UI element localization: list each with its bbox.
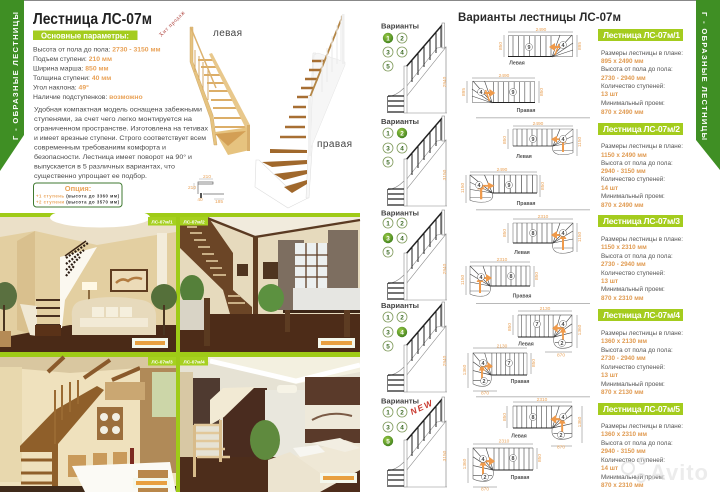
variant row 3: plan views: 2310 bbox=[538, 214, 549, 220]
variant row 5: plan views: 1360 bbox=[462, 458, 468, 469]
left side ribbon: Г - ОБРАЗНЫЕ ЛЕСТНИЦЫ bbox=[11, 12, 20, 140]
photo 4: bedroom staircase: ЛС-07м/4 bbox=[183, 360, 205, 366]
variant row 4: plan views: Левая bbox=[518, 342, 534, 348]
right side ribbon: Г - ОБРАЗНЫЕ ЛЕСТНИЦЫ bbox=[700, 12, 709, 140]
tread dimensions diagram: 210 bbox=[203, 174, 211, 180]
variant row 4: plan views: 4 bbox=[562, 322, 564, 328]
variant row 4: selector and side view: Варианты bbox=[381, 301, 419, 310]
variant row 4: selector and side view: 2 bbox=[400, 314, 404, 321]
variant row 3: plan views: 4 bbox=[480, 275, 482, 281]
variant row 5: plan views: 850 bbox=[502, 413, 508, 421]
variant row 4: plan views bbox=[462, 306, 583, 396]
variant row 2: plan views: 1150 bbox=[460, 183, 466, 193]
photo 2: wooden house staircase: ЛС-07м/2 bbox=[183, 220, 205, 226]
variant row 4: selector and side view: 5 bbox=[386, 343, 390, 350]
spec card 3: 870 x 2310 мм bbox=[601, 295, 644, 302]
parameters list: Наличие подступенков: возможно bbox=[33, 94, 143, 101]
variant row 1: plan views: 895 bbox=[577, 42, 583, 50]
spec card 4: Размеры лестницы в плане: bbox=[601, 330, 683, 337]
spec card 1: Количество ступеней: bbox=[601, 82, 665, 90]
spec card 1: 2730 - 2940 мм bbox=[601, 75, 646, 82]
parameters list: Подъем ступени: 210 мм bbox=[33, 56, 112, 63]
spec card 2: 1150 x 2490 мм bbox=[601, 152, 647, 159]
spec card 1: Лестница ЛС-07м/1 bbox=[603, 30, 680, 40]
spec card 4: Минимальный проем: bbox=[601, 380, 665, 388]
photo 3: dining room staircase: ЛС-07м/3 bbox=[151, 360, 173, 366]
spec card 4: 870 x 2130 мм bbox=[601, 389, 644, 396]
label: right staircase: правая bbox=[317, 139, 352, 150]
variant row 1: selector and side view bbox=[381, 22, 448, 113]
variant row 4: plan views: 4 bbox=[482, 361, 484, 367]
variant row 5: plan views: 870 bbox=[557, 444, 565, 450]
variant row 1: plan views: 850 bbox=[498, 42, 504, 50]
tread dimensions diagram: 40 bbox=[197, 197, 203, 203]
variant row 4: plan views: 850 bbox=[531, 359, 537, 367]
parameters list: Толщина ступени: 40 мм bbox=[33, 75, 111, 82]
variant row 1: selector and side view: 3 bbox=[386, 49, 390, 56]
spec card 4: Лестница ЛС-07м/4 bbox=[603, 310, 680, 320]
spec card 2: 870 x 2490 мм bbox=[601, 202, 644, 209]
variant row 5: selector and side view: 1 bbox=[386, 409, 390, 416]
variant row 2: plan views: 1150 bbox=[577, 137, 583, 147]
variant row 4: selector and side view: 1 bbox=[386, 314, 390, 321]
photo 4: bedroom staircase bbox=[180, 357, 360, 492]
description paragraph bbox=[34, 106, 209, 180]
variant row 4: plan views: 2130 bbox=[540, 306, 551, 312]
variant row 4: plan views: 870 bbox=[557, 352, 565, 358]
variant row 3: selector and side view: Варианты bbox=[381, 208, 419, 218]
variant row 5: plan views: 8 bbox=[512, 456, 514, 462]
variant row 5: plan views bbox=[462, 397, 583, 492]
variant row 4: plan views: Правая bbox=[511, 379, 529, 385]
photo 3: dining room staircase bbox=[0, 357, 176, 492]
variant row 2: plan views: 9 bbox=[532, 137, 534, 143]
spec card 2: Количество ступеней: bbox=[601, 175, 665, 183]
variant row 5: selector and side view: NEW bbox=[409, 398, 435, 417]
variant row 3: plan views: Левая bbox=[514, 250, 530, 256]
variant row 4: plan views: 870 bbox=[481, 390, 489, 396]
spec card 3: 2730 - 2940 мм bbox=[601, 261, 646, 268]
variant row 4: plan views: 2 bbox=[560, 341, 564, 347]
spec card 5: Размеры лестницы в плане: bbox=[601, 423, 683, 430]
option box bbox=[34, 183, 122, 207]
variant row 2: plan views: 2490 bbox=[497, 167, 508, 173]
right side ribbon bbox=[696, 0, 720, 170]
spec card 5: Высота от пола до пола: bbox=[601, 440, 673, 447]
variant row 2: plan views: 4 bbox=[562, 137, 564, 143]
variant row 1: plan views: 4 bbox=[562, 43, 564, 49]
variant row 1: selector and side view: 4 bbox=[400, 49, 404, 56]
variant row 5: plan views: 4 bbox=[562, 415, 564, 421]
variant row 3: selector and side view: 4 bbox=[400, 235, 404, 242]
variant row 5: selector and side view: 2 bbox=[400, 409, 404, 416]
variant row 3: plan views: Правая bbox=[513, 294, 531, 300]
photo 1: living room with white staircase: ЛС-07м/1 bbox=[151, 220, 173, 226]
variant row 3: selector and side view bbox=[381, 208, 448, 300]
variant row 5: plan views: 2 bbox=[484, 475, 486, 481]
variant row 4: selector and side view: 2940 bbox=[442, 355, 448, 366]
spec card 2: Лестница ЛС-07м/2 bbox=[603, 124, 680, 134]
variant row 4: plan views: 2 bbox=[482, 379, 486, 385]
variant row 3: plan views bbox=[460, 214, 583, 300]
spec card 3: Высота от пола до пола: bbox=[601, 253, 673, 260]
spec card 1: 870 x 2490 мм bbox=[601, 109, 644, 116]
description paragraph: современным требованиям комфорта и bbox=[34, 144, 166, 152]
photo 1: living room with white staircase bbox=[0, 208, 177, 352]
parameters list: Высота от пола до пола: 2730 - 3150 мм bbox=[33, 46, 161, 54]
spec card 3 bbox=[598, 215, 683, 302]
variant row 5: plan views: 2310 bbox=[537, 397, 548, 403]
spec card 3: Лестница ЛС-07м/3 bbox=[603, 216, 680, 226]
photo 2: wooden house staircase bbox=[180, 217, 360, 352]
divider bbox=[476, 302, 590, 305]
spec card 2: 2940 - 3150 мм bbox=[601, 168, 646, 175]
spec card 1: 895 x 2490 мм bbox=[601, 58, 644, 65]
photo grid frame bbox=[0, 213, 360, 492]
spec card 1 bbox=[598, 29, 683, 116]
spec card 3: 13 шт bbox=[601, 278, 618, 285]
variant row 2: plan views: 9 bbox=[508, 183, 510, 189]
best seller stamp: Хит продаж bbox=[158, 10, 187, 38]
variant row 3: plan views: 850 bbox=[534, 272, 540, 280]
description paragraph: ступенями, за счет чего легко монтируется на bbox=[34, 116, 192, 123]
description paragraph: ограниченном пространстве. Изготовлена на тетивах bbox=[34, 126, 209, 132]
left side ribbon bbox=[0, 0, 24, 171]
variant row 2: plan views: 4 bbox=[478, 183, 480, 189]
variant row 5: plan views: 850 bbox=[537, 454, 543, 462]
spec card 3: Минимальный проем: bbox=[601, 285, 665, 293]
variant row 1: plan views: 4 bbox=[480, 90, 482, 96]
variant row 2: selector and side view: 3150 bbox=[442, 169, 448, 180]
parameters list: Угол наклона: 49° bbox=[33, 84, 89, 92]
variant row 1: plan views: Правая bbox=[517, 108, 535, 114]
variant row 3: selector and side view: 2 bbox=[400, 220, 404, 227]
spec card 5: 2940 - 3150 мм bbox=[601, 448, 646, 455]
variant row 1: plan views: 9 bbox=[528, 45, 530, 51]
variant row 3: selector and side view: 5 bbox=[386, 249, 390, 256]
variant row 2: plan views: 2490 bbox=[533, 121, 544, 127]
label: left staircase: левая bbox=[213, 28, 242, 39]
divider bbox=[476, 116, 590, 119]
variant row 2: plan views: Левая bbox=[516, 154, 532, 160]
variant row 4: selector and side view: 3 bbox=[386, 329, 390, 336]
spec card 3: Размеры лестницы в плане: bbox=[601, 236, 683, 243]
variant row 1: plan views bbox=[461, 27, 583, 114]
spec card 2: Высота от пола до пола: bbox=[601, 160, 673, 167]
variant row 5: plan views: 2 bbox=[560, 433, 562, 439]
variant row 5: selector and side view: Варианты bbox=[381, 396, 419, 406]
spec card 2: Минимальный проем: bbox=[601, 192, 665, 200]
variant row 1: selector and side view: 1 bbox=[386, 35, 390, 42]
tread dimensions diagram: 185 bbox=[215, 199, 223, 205]
variant row 3: plan views: 8 bbox=[532, 231, 534, 237]
variant row 3: plan views: 1150 bbox=[577, 232, 583, 242]
tread dimensions diagram: 210 bbox=[188, 185, 196, 191]
title: Лестница ЛС-07м bbox=[33, 11, 152, 28]
parameters heading: Основные параметры: bbox=[41, 32, 129, 40]
option box: +2 ступени (высота до 3570 мм) bbox=[36, 200, 120, 204]
divider bbox=[476, 396, 590, 398]
spec card 5 bbox=[598, 403, 683, 489]
variant row 3: plan views: 2310 bbox=[497, 257, 508, 263]
variant row 5: selector and side view: 4 bbox=[400, 424, 404, 431]
option box: Опция: bbox=[65, 184, 91, 193]
tread dimensions diagram bbox=[188, 174, 224, 205]
variant row 2: selector and side view bbox=[381, 116, 448, 206]
variant row 3: plan views: 850 bbox=[502, 229, 508, 237]
spec card 1: 13 шт bbox=[601, 91, 618, 98]
variant row 5: plan views: Правая bbox=[511, 475, 529, 481]
variant row 4: plan views: 1360 bbox=[462, 364, 468, 375]
variant row 2: selector and side view: 2 bbox=[400, 130, 404, 137]
variant row 4: selector and side view: 4 bbox=[400, 329, 404, 336]
watermark: Avito bbox=[650, 460, 708, 485]
spec card 4: 1360 x 2130 мм bbox=[601, 338, 647, 345]
variant row 3: selector and side view: 2940 bbox=[442, 263, 448, 274]
variant row 1: selector and side view: 2940 bbox=[442, 76, 448, 87]
variant row 1: plan views: Левая bbox=[509, 60, 525, 66]
variant row 5: plan views: 2310 bbox=[499, 438, 510, 444]
variant row 5: selector and side view: 3 bbox=[386, 424, 390, 431]
variant row 1: selector and side view: Варианты bbox=[381, 22, 419, 30]
natural wood left-turn staircase bbox=[190, 27, 250, 155]
description paragraph: существенно упрощает ее подбор. bbox=[34, 172, 147, 180]
variant row 1: plan views: 9 bbox=[512, 90, 514, 96]
spec card 4: Количество ступеней: bbox=[601, 363, 665, 371]
variant row 3: selector and side view: 1 bbox=[386, 220, 390, 227]
spec card 5: 14 шт bbox=[601, 465, 618, 472]
parameters list bbox=[33, 46, 161, 101]
top edge line bbox=[24, 0, 720, 1]
variant row 2: plan views bbox=[460, 121, 583, 207]
variant row 2: plan views: 850 bbox=[502, 136, 508, 144]
variant row 4: selector and side view bbox=[381, 301, 448, 392]
variant row 4: plan views: 850 bbox=[507, 323, 513, 331]
spec card 5: 1360 x 2310 мм bbox=[601, 431, 647, 438]
variant row 1: selector and side view: 5 bbox=[386, 63, 390, 70]
variant row 4: plan views: 2130 bbox=[497, 344, 508, 350]
variant row 4: plan views: 1360 bbox=[577, 324, 583, 335]
spec card 5: Лестница ЛС-07м/5 bbox=[603, 404, 680, 414]
spec card 4: 13 шт bbox=[601, 372, 618, 379]
variant row 3: selector and side view: 3 bbox=[386, 235, 390, 242]
variant row 5: selector and side view bbox=[381, 396, 448, 487]
watermark bbox=[622, 458, 708, 485]
spec card 5: Количество ступеней: bbox=[601, 456, 665, 464]
option box: +1 ступень (высота до 3360 мм) bbox=[36, 194, 120, 198]
variant row 4: plan views: 7 bbox=[508, 361, 510, 367]
variant row 5: selector and side view: 3150 bbox=[442, 450, 448, 461]
variant row 3: plan views: 8 bbox=[510, 274, 512, 280]
spec card 1: Размеры лестницы в плане: bbox=[601, 50, 683, 57]
divider bbox=[476, 208, 590, 211]
description paragraph: безопасности. Лестница имеет поворот на 90° и bbox=[34, 153, 192, 161]
right page title: Варианты лестницы ЛС-07м bbox=[458, 12, 621, 24]
variant row 5: selector and side view: 5 bbox=[386, 438, 390, 445]
spec card 2: 14 шт bbox=[601, 185, 618, 192]
spec card 3: 1150 x 2310 мм bbox=[601, 244, 647, 251]
variant row 2: selector and side view: 5 bbox=[386, 159, 390, 166]
variant row 2: plan views: Правая bbox=[517, 201, 535, 207]
spec card 4: Высота от пола до пола: bbox=[601, 347, 673, 354]
spec card 5: Минимальный проем: bbox=[601, 473, 665, 481]
description paragraph: и имеет врезные ступени. Строго соответствует всем bbox=[34, 135, 206, 142]
variant row 5: plan views: 8 bbox=[532, 415, 534, 421]
variant row 3: plan views: 4 bbox=[562, 231, 564, 237]
spec card 4: 2730 - 2940 мм bbox=[601, 355, 646, 362]
variant row 2: selector and side view: 1 bbox=[386, 130, 390, 137]
variant row 1: plan views: 2490 bbox=[536, 27, 547, 33]
variant row 3: plan views: 1150 bbox=[460, 275, 466, 285]
white right-turn staircase bbox=[255, 14, 345, 208]
variant row 2: selector and side view: 3 bbox=[386, 145, 390, 152]
description paragraph: выпускается в 5 различных вариантах, что bbox=[34, 164, 175, 170]
variant row 1: selector and side view: 2 bbox=[400, 35, 404, 42]
spec card 2 bbox=[598, 123, 683, 209]
variant row 4: plan views: 7 bbox=[536, 322, 538, 328]
variant row 5: plan views: 1360 bbox=[577, 416, 583, 427]
spec card 3: Количество ступеней: bbox=[601, 269, 665, 277]
variant row 1: plan views: 895 bbox=[461, 88, 467, 96]
spec card 1: Минимальный проем: bbox=[601, 99, 665, 107]
spec card 4 bbox=[598, 309, 683, 396]
variant row 2: selector and side view: Варианты bbox=[381, 117, 419, 126]
spec card 5: 870 x 2310 мм bbox=[601, 482, 644, 489]
variant row 2: plan views: 850 bbox=[540, 182, 546, 190]
spec card 2: Размеры лестницы в плане: bbox=[601, 143, 683, 150]
parameters list: Ширина марша: 850 мм bbox=[33, 66, 109, 72]
variant row 2: selector and side view: 4 bbox=[400, 145, 404, 152]
variant row 1: plan views: 850 bbox=[539, 88, 545, 96]
variant row 5: plan views: 4 bbox=[482, 457, 484, 463]
variant row 5: plan views: Левая bbox=[511, 434, 527, 440]
description paragraph: Удобная компактная модель оснащена забежными bbox=[34, 106, 202, 114]
variant row 1: plan views: 2490 bbox=[499, 73, 510, 79]
spec card 1: Высота от пола до пола: bbox=[601, 66, 673, 73]
